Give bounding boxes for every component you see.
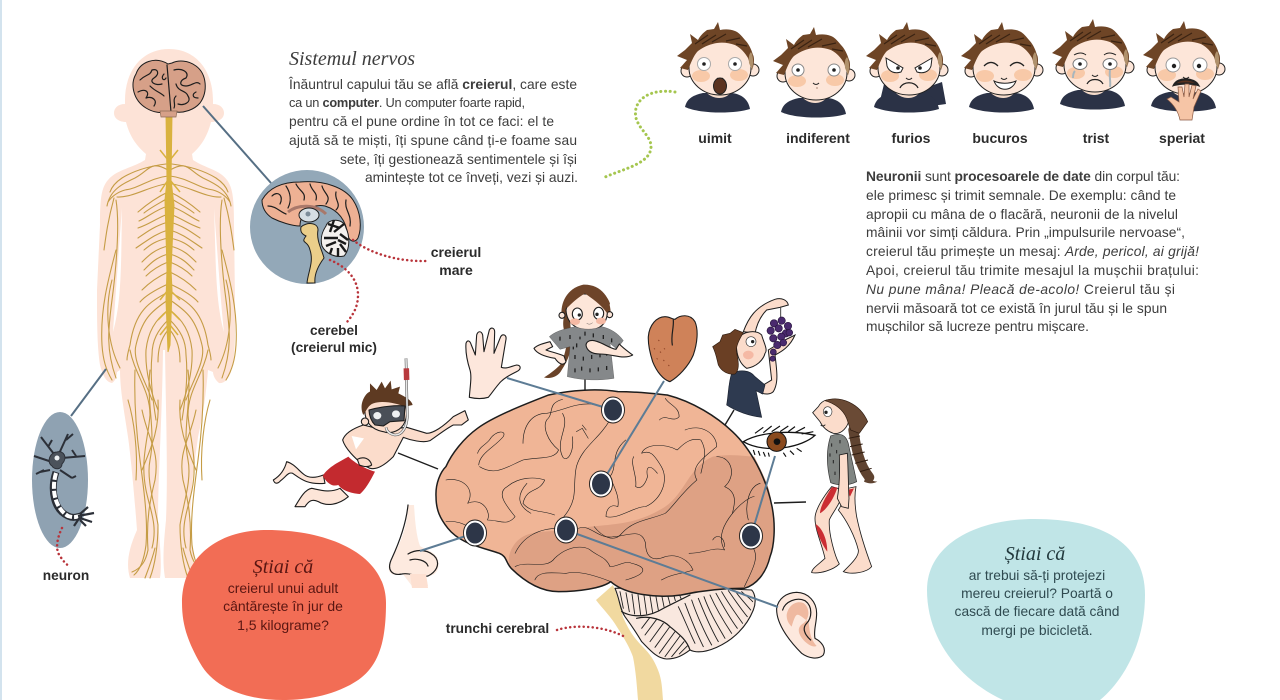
snorkel [386,358,407,435]
braid [544,313,572,378]
body text: ajută să te miști, îți spune când ți-e foame sau [289,133,577,148]
head [365,391,407,433]
callout heading: Știai că [1005,543,1065,565]
torso and arms [343,411,468,469]
icon: nose [389,505,438,588]
body text: sete, îți gestionează sentimentele și își [340,152,577,167]
callout heading: Știai că [253,556,313,578]
figure: girl touching chest [534,285,633,380]
body text: pentru că el pune ordine în tot ce faci: el te [289,114,554,129]
label: trunchi cerebral: trunchi cerebral [446,621,549,636]
arms [534,342,566,364]
callout text: ar trebui să-ți protejezi [969,568,1105,583]
panel: body with nervous system [97,49,236,578]
emotion labels: speriat [1159,130,1205,146]
brain nodes [464,397,762,549]
face [566,294,607,330]
icon: brain stem [596,585,663,700]
face: bucuros [961,22,1043,113]
shorts [323,457,375,494]
text: Sistemul nervos [288,48,578,185]
emotion labels: trist [1083,130,1110,146]
panel: neuron oval [32,369,106,548]
icon: brain top view [133,60,205,117]
text: neurons paragraph: nervii măsoară tot ce există în jurul tău și le spun [866,301,1167,316]
corpus callosum [288,206,326,214]
emotion labels: indiferent [786,130,850,146]
legs [273,462,325,484]
body text: Înăuntrul capului tău se află creierul, care este [288,76,577,92]
text: neurons paragraph: Neuronii sunt procesoarele de date din corpul tău: [866,169,1180,184]
leg: left [812,487,843,573]
darker lower lobe shading [509,455,774,596]
heading: Sistemul nervos [289,48,415,70]
dotted line: neuron [57,528,70,567]
ears [559,312,565,318]
callout text: creierul unui adult [228,580,338,596]
figure: boy eating grapes [713,299,795,417]
icon: neuron [34,434,94,526]
callout text: mergi pe bicicletă. [981,623,1093,638]
icon: eye [743,426,815,457]
label: cerebel: (creierul mic) [291,340,377,355]
face: uimit [677,22,759,113]
leg: right [838,487,872,573]
dotted line: cerebel [330,260,358,322]
face: indiferent [773,27,855,118]
text: neurons paragraph: Apoi, creierul tău trimite mesajul la mușchii brațului: [866,263,1199,278]
mask [369,406,405,426]
text: neurons paragraph: apropii cu mâna de o flacără, neuronii de la nivelul [866,207,1178,222]
face: furios [866,22,948,113]
emotion labels [698,130,1205,146]
icon: hand [466,328,520,399]
pointer line to brain section [203,106,271,183]
blue connector lines [420,378,778,607]
callout text: cască de fiecare dată când [955,604,1119,619]
icon: large brain [436,390,774,596]
label: cerebel: cerebel [310,323,358,338]
label: creierul mare: mare [439,262,473,278]
callout text: cântărește în jur de [223,598,343,614]
hand [357,458,372,466]
figure: girl with muscles [812,399,877,573]
emotion labels: furios [892,130,931,146]
text: neurons paragraph [866,169,1199,334]
face: trist [1052,19,1134,110]
body text: ca un computer. Un computer foarte rapid, [289,95,525,110]
text: neurons paragraph: creierul tău primește un mesaj: Arde, pericol, ai grijă! [866,244,1199,259]
label: neuron: neuron [43,568,89,583]
icon: hand on mouth [1167,84,1201,120]
body silhouette [97,49,235,578]
dotted line: green to faces [603,91,675,178]
body text: amintește tot ce înveți, vezi și auzi. [365,170,578,185]
icon: tongue [648,316,697,382]
leg muscles [816,487,854,552]
emotion labels: uimit [698,130,732,146]
callout text: 1,5 kilograme? [237,617,329,633]
callout: teal [927,519,1145,700]
dotted line: trunchi cerebral [557,627,625,637]
braid [853,430,869,477]
icon: ear [777,592,824,658]
text: neurons paragraph: mâinii vor simți căldura. Prin „impulsurile nervoase“, [866,225,1185,240]
cerebellum [321,220,349,257]
text: neurons paragraph: ele primesc și trimit semnale. De exemplu: când te [866,188,1176,203]
nerves [102,114,236,578]
panel: brain section circle [250,170,364,284]
shirt [549,327,623,380]
callout: red [182,530,386,700]
figure: swimmer [273,358,468,507]
text: neurons paragraph: mușchilor să lucreze pentru mișcare. [866,319,1089,334]
icon: cerebellum ridged [615,587,755,659]
head [813,400,849,434]
callout text: mereu creierul? Poartă o [961,586,1113,601]
body text [288,76,578,185]
emotion labels: bucuros [972,130,1028,146]
shirt [827,434,857,485]
text: neurons paragraph: Nu pune mâna! Pleacă de-acolo! Creierul tău și [866,282,1175,297]
hair back [561,285,611,320]
dotted line: creierul mare [353,240,428,261]
black connector lines [398,378,806,503]
label: creierul mare: creierul [431,244,481,260]
arm [837,453,849,508]
face: speriat [1143,21,1225,120]
